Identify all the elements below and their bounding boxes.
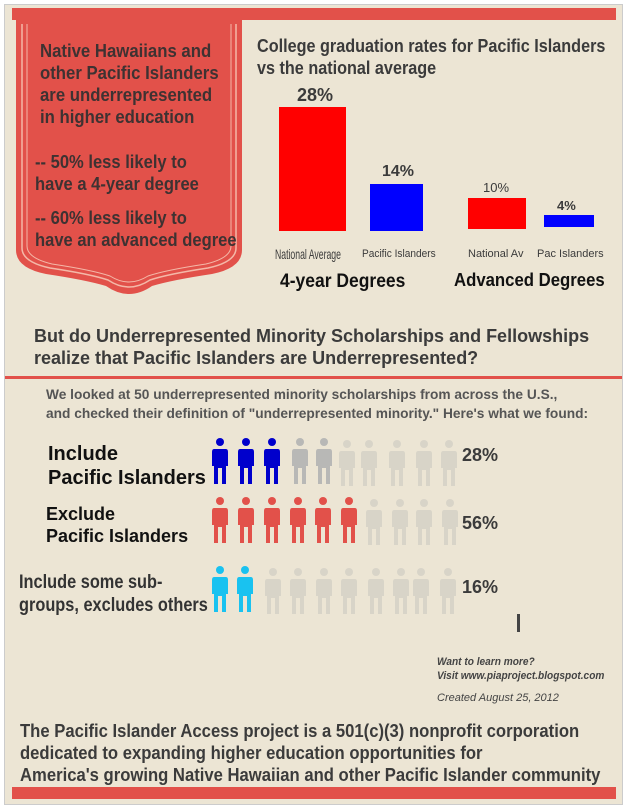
banner text: are underrepresented [40, 85, 212, 105]
row labels: Include [48, 443, 118, 465]
row 1 icons [212, 438, 457, 486]
row labels: Pacific Islanders [48, 467, 206, 489]
small tick mark [517, 614, 520, 632]
banner stats: have an advanced degree [35, 230, 237, 250]
banner stats [35, 152, 237, 250]
banner text [40, 41, 219, 127]
intro text: We looked at 50 underrepresented minority scholarships from across the U.S., [46, 386, 557, 402]
bar chart: 4-year degrees: National Average [275, 246, 341, 262]
row 3 icons [212, 566, 456, 614]
footer text [20, 720, 600, 785]
question heading: But do Underrepresented Minority Scholarships and Fellowships [34, 326, 589, 346]
footer text: dedicated to expanding higher education opportunities for [20, 742, 483, 763]
text: Include some sub- [19, 572, 162, 593]
text: 56% [462, 513, 498, 533]
bar chart: advanced degrees: Advanced Degrees [454, 270, 605, 290]
text: groups, excludes others [19, 595, 208, 616]
learn more [437, 656, 604, 682]
text: Exclude [46, 504, 115, 524]
intro text: and checked their definition of "underrepresented minority." Here's what we found: [46, 405, 588, 421]
banner stats: -- 50% less likely to [35, 152, 187, 172]
banner stats: -- 60% less likely to [35, 208, 187, 228]
percentages: 28% [462, 445, 498, 465]
text: 16% [462, 577, 498, 597]
banner text: other Pacific Islanders [40, 63, 219, 83]
top red bar [12, 8, 616, 20]
text: Pacific Islanders [46, 526, 188, 546]
row labels [48, 443, 206, 489]
bar chart: 4-year degrees: 14% [382, 163, 414, 180]
chart title: vs the national average [257, 58, 436, 78]
bar chart: 4-year degrees: Pacific Islanders [362, 248, 436, 260]
chart title: College graduation rates for Pacific Islanders [257, 36, 605, 56]
chart title [257, 36, 605, 78]
footer text: The Pacific Islander Access project is a 501(c)(3) nonprofit corporation [20, 720, 579, 741]
intro text [46, 386, 588, 421]
footer text: America's growing Native Hawaiian and other Pacific Islander community [20, 764, 600, 785]
bar chart: advanced degrees [454, 180, 605, 290]
banner text: Native Hawaiians and [40, 41, 211, 61]
row 2 icons [212, 497, 458, 545]
bar chart: 4-year degrees: 28% [297, 85, 333, 105]
banner text: in higher education [40, 107, 194, 127]
bar chart: 4-year degrees [275, 85, 436, 292]
banner: underrepresented [16, 20, 242, 294]
divider red line [5, 376, 622, 379]
learn more: Want to learn more? [437, 656, 535, 668]
bar chart: advanced degrees: 4% [557, 198, 576, 213]
bar chart: advanced degrees: National Av [468, 248, 523, 260]
created date: Created August 25, 2012 [437, 692, 559, 704]
question heading [34, 326, 589, 368]
banner stats: have a 4-year degree [35, 174, 199, 194]
learn more: Visit www.piaproject.blogspot.com [437, 670, 604, 682]
question heading: realize that Pacific Islanders are Underrepresented? [34, 348, 478, 368]
bottom red bar [12, 787, 616, 799]
bar chart: advanced degrees: Pac Islanders [537, 248, 604, 260]
bar chart: 4-year degrees: 4-year Degrees [280, 271, 405, 292]
bar chart: advanced degrees: 10% [483, 180, 509, 195]
